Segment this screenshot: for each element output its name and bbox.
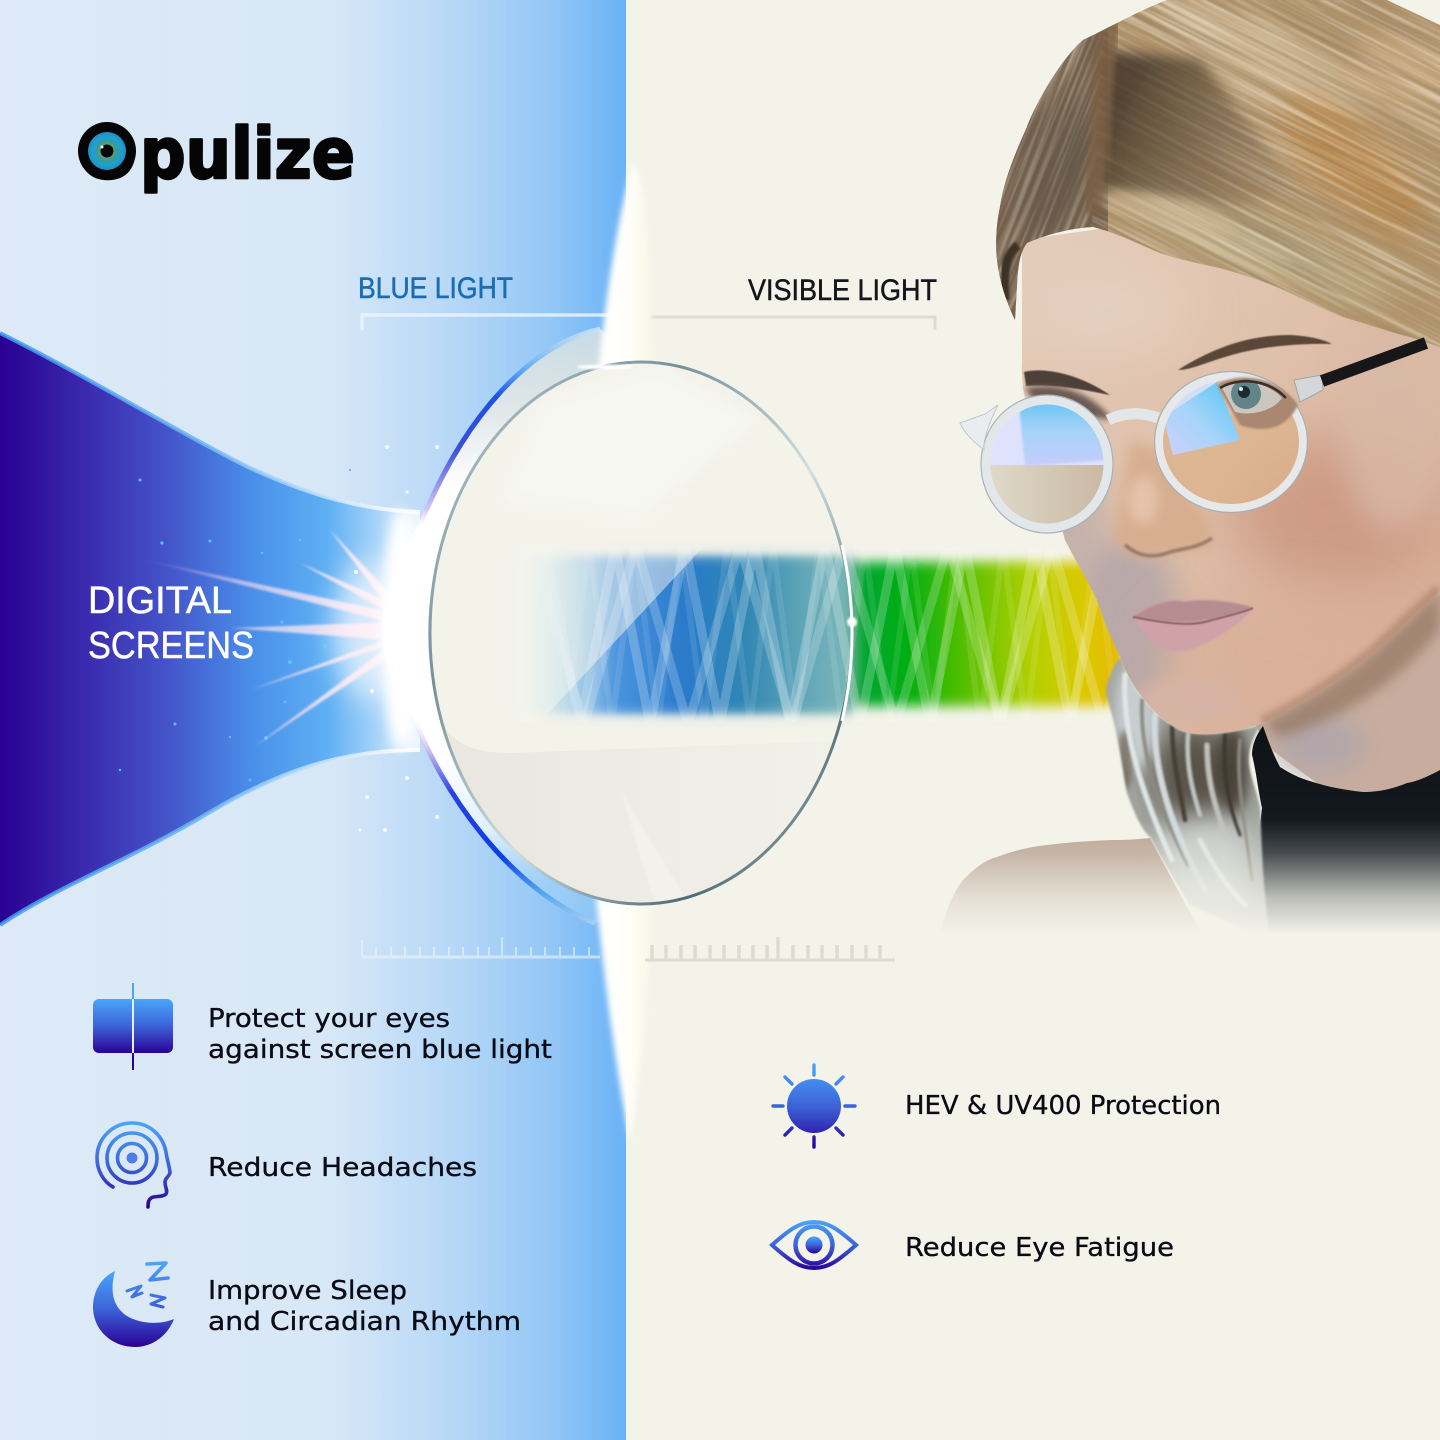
- glasses: [960, 343, 1426, 533]
- icon: eye: [772, 1222, 856, 1268]
- person with glasses: [944, 0, 1440, 929]
- right lens: [1154, 370, 1308, 514]
- nose: [1113, 440, 1214, 558]
- right panel background: [626, 0, 1440, 1440]
- right hinge: [1294, 375, 1323, 402]
- bottom fade: [920, 820, 1440, 950]
- benefit: protect your eyes: Protect your eyes: [208, 1004, 450, 1034]
- benefit: improve sleep: Improve Sleep: [208, 1276, 407, 1306]
- bridge: [1108, 414, 1158, 420]
- benefit: protect your eyes: [93, 983, 552, 1070]
- benefit: HEV and UV400 protection: HEV & UV400 Protection: [905, 1091, 1221, 1121]
- lower hair: [1104, 656, 1267, 926]
- digital screens label: DIGITAL: [88, 580, 232, 622]
- benefit: protect your eyes: against screen blue light: [208, 1035, 552, 1065]
- black top: [1252, 726, 1440, 950]
- central vertical glow: [596, 165, 652, 1142]
- eyebrows: [1024, 335, 1332, 395]
- benefit: improve sleep: and Circadian Rhythm: [208, 1307, 521, 1337]
- bracket: visible light: [650, 317, 935, 330]
- temple arm: [1322, 343, 1426, 381]
- benefit: HEV and UV400 protection: [773, 1065, 1221, 1147]
- left eye shadow: [1025, 386, 1112, 420]
- bracket: blue light: [362, 315, 612, 330]
- neck: [1240, 560, 1440, 800]
- right eye: [1217, 378, 1298, 429]
- benefit: reduce headaches: [97, 1123, 477, 1207]
- icon: eye in logo: [78, 122, 136, 180]
- left lens: [980, 395, 1113, 533]
- left hinge: [960, 405, 998, 450]
- face: [1022, 200, 1440, 734]
- blue light label: BLUE LIGHT: [358, 272, 513, 305]
- icon: moon and zzz: [93, 1263, 174, 1347]
- light spectrum band: [538, 546, 1134, 724]
- icon: sun: [773, 1065, 855, 1147]
- shoulder: [935, 838, 1210, 950]
- visible light label: VISIBLE LIGHT: [748, 274, 937, 307]
- ruler scale: visible side: [645, 937, 895, 960]
- hair: [996, 0, 1440, 347]
- digital screens label: [88, 580, 254, 667]
- benefit: reduce eye fatigue: [772, 1222, 1174, 1268]
- digital screens light beam: [0, 333, 439, 925]
- benefit: improve sleep: [93, 1263, 521, 1347]
- logo: pulize: [140, 113, 355, 195]
- icon: head with rings: [97, 1123, 170, 1207]
- rear lens crescent: [382, 329, 650, 923]
- benefit: reduce eye fatigue: Reduce Eye Fatigue: [905, 1233, 1174, 1263]
- lips: [1133, 600, 1253, 652]
- logo: O: [78, 113, 138, 195]
- sunburst flare from screens: [137, 530, 412, 746]
- icon: lens split: [93, 983, 173, 1070]
- front lens: [432, 364, 660, 902]
- lens rim: [430, 362, 857, 904]
- left panel background: [0, 0, 626, 1440]
- digital screens label: SCREENS: [88, 625, 254, 667]
- benefit: reduce headaches: Reduce Headaches: [208, 1153, 477, 1183]
- ruler scale: blue side: [362, 937, 600, 957]
